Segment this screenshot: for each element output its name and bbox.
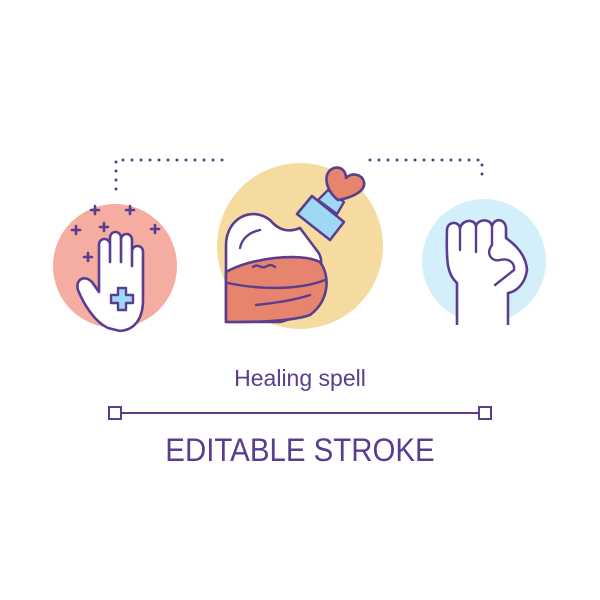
icon: heart potion bottle	[217, 163, 383, 329]
connector dotted lines	[116, 160, 482, 189]
title: Healing spell: Healing spell	[234, 365, 366, 391]
divider with end squares	[108, 406, 492, 420]
icon: healing hand	[53, 204, 177, 331]
subtitle: EDITABLE STROKE: EDITABLE STROKE	[165, 432, 435, 468]
icon: raised fist	[422, 199, 546, 325]
